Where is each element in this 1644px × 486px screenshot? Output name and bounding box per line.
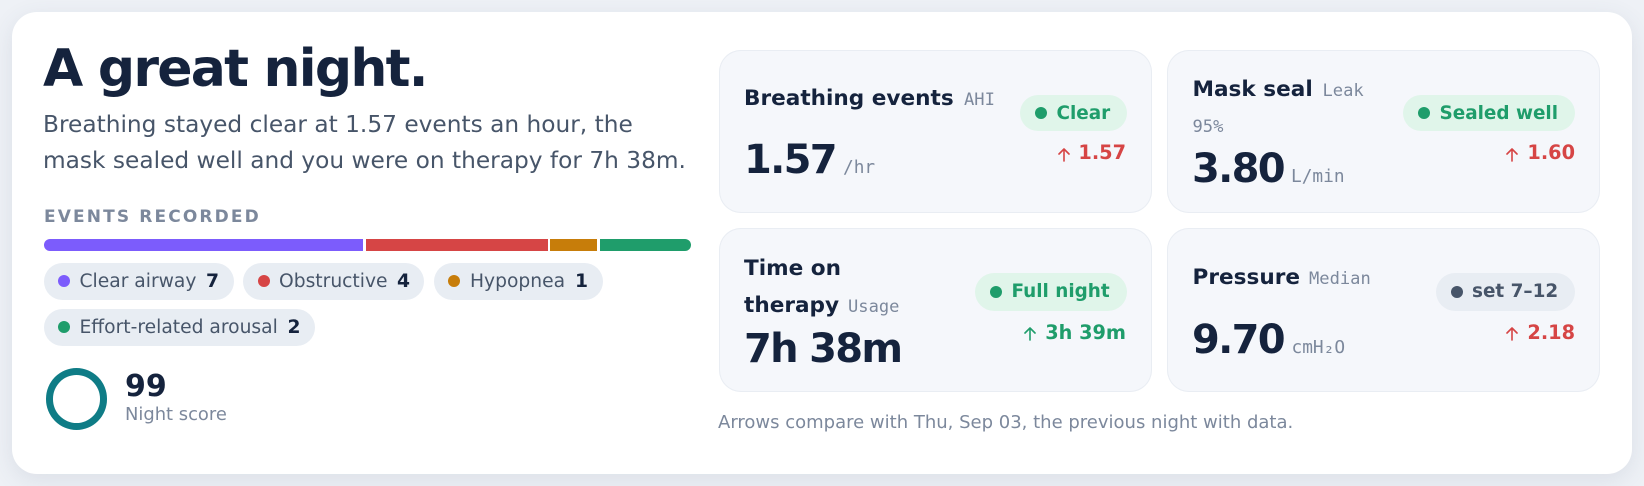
chip: clear airway: 7: [206, 271, 219, 292]
panel: mask seal: Leak: [1322, 81, 1364, 101]
stacked bar: events by type: [44, 239, 691, 251]
night score ring: [46, 368, 107, 430]
chip: hypopnea: Hypopnea: [470, 271, 565, 292]
night score label: Night score: [125, 404, 227, 425]
panel: time on therapy: therapy: [744, 292, 839, 318]
panel: mask seal: Mask seal: [1192, 77, 1313, 102]
heading: events recorded: EVENTS RECORDED: [44, 206, 261, 226]
panel: time on therapy: Time on: [744, 256, 841, 281]
chip: effort-related arousal: Effort-related arousal: [80, 317, 278, 338]
panel: time on therapy: 7h 38m: [744, 326, 901, 372]
title: A great night.: [43, 39, 427, 99]
summary text: [43, 110, 686, 174]
panel: mask seal: [1167, 50, 1600, 213]
panel: pressure: 2.18: [1527, 321, 1575, 344]
panel: breathing events: /hr: [843, 156, 875, 178]
night score value: 99: [125, 369, 167, 404]
panel: pressure: Median: [1309, 269, 1371, 289]
panel: breathing events: [719, 50, 1152, 213]
panel: pressure: [1167, 228, 1600, 392]
panel: breathing events: 1.57: [744, 137, 836, 183]
chip: obstructive: Obstructive: [279, 271, 388, 292]
panel: mask seal: L/min: [1291, 166, 1345, 186]
chip: hypopnea: [434, 263, 602, 300]
chip: hypopnea: 1: [575, 271, 588, 292]
panel: breathing events: AHI: [964, 90, 995, 110]
footnote: Arrows compare with Thu, Sep 03, the previous night with data.: [718, 412, 1293, 432]
panel: breathing events: Clear: [1056, 103, 1110, 124]
panel: mask seal: Sealed well: [1440, 103, 1558, 124]
chip: clear airway: Clear airway: [80, 271, 196, 292]
panel: time on therapy: Full night: [1012, 281, 1110, 302]
panel: breathing events: 1.57: [1078, 141, 1126, 164]
panel: pressure: set 7–12: [1472, 281, 1558, 302]
panel: pressure: 9.70: [1192, 317, 1284, 363]
panel: mask seal: 95%: [1192, 117, 1223, 137]
chip: effort-related arousal: [44, 309, 315, 346]
summary text: Breathing stayed clear at 1.57 events an hour, the: [43, 110, 633, 138]
panel: time on therapy: 3h 39m: [1045, 321, 1126, 344]
summary text: mask sealed well and you were on therapy for 7h 38m.: [43, 146, 686, 174]
panel: pressure: cmH₂O: [1292, 336, 1345, 358]
chip: clear airway: [44, 263, 234, 300]
panel: breathing events: Breathing events: [744, 86, 954, 111]
chip: obstructive: 4: [397, 271, 410, 292]
panel: mask seal: 1.60: [1527, 141, 1575, 164]
chip: effort-related arousal: 2: [288, 317, 301, 338]
panel: mask seal: 3.80: [1192, 146, 1284, 192]
panel: pressure: Pressure: [1192, 265, 1300, 290]
panel: time on therapy: [719, 228, 1152, 392]
panel: time on therapy: Usage: [848, 297, 899, 317]
chip: obstructive: [243, 263, 424, 300]
